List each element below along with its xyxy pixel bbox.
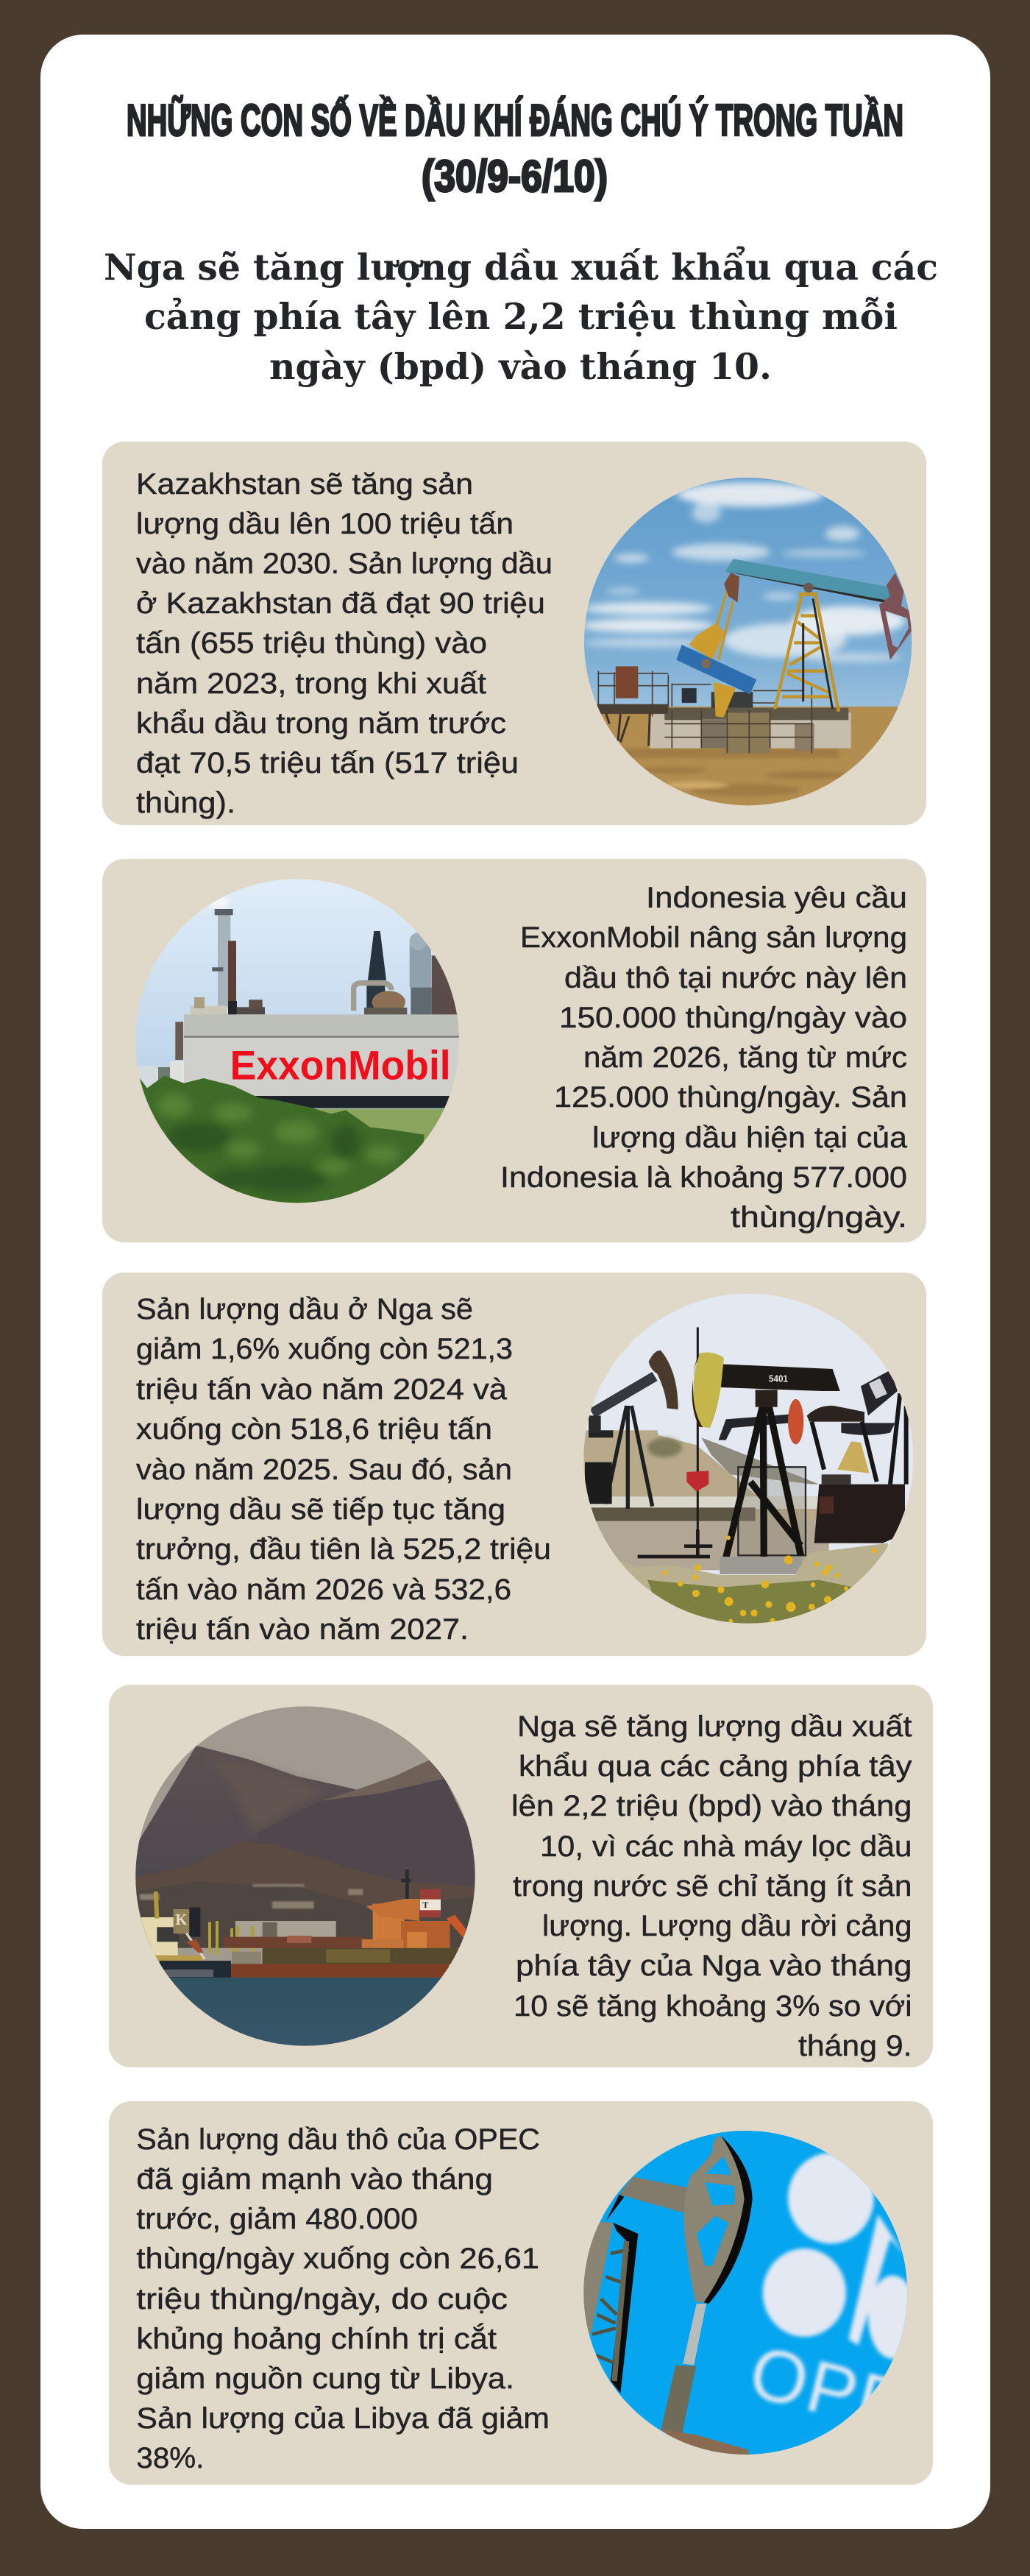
subtitle: ngày (bpd) vào tháng 10. [269,345,772,388]
text: Nga sản lượng: lượng dầu sẽ tiếp tục tăng [136,1493,505,1526]
photo: tanker in port with mountains: K [175,1912,187,1928]
text: OPEC: đã giảm mạnh vào tháng [136,2163,493,2195]
panel: Indonesia [102,859,926,1242]
text: Nga sản lượng: triệu tấn vào năm 2024 và [136,1373,507,1406]
text: Indonesia [500,882,907,1234]
text: Nga sản lượng: triệu tấn vào năm 2027. [136,1613,469,1646]
text: Kazakhstan: thùng). [136,787,235,819]
subtitle: cảng phía tây lên 2,2 triệu thùng mỗi [144,295,898,338]
text: Kazakhstan: khẩu dầu trong năm trước [136,707,506,740]
photo: pumpjack with OPEC logo: OPEC [742,2330,970,2462]
text: Kazakhstan: Kazakhstan sẽ tăng sản [136,468,473,500]
photo: tanker in port with mountains [135,1706,475,2046]
photo: ExxonMobil refinery tank: ExxonMobil [230,1042,451,1089]
photo: pumpjack on steppe [584,478,912,805]
text: Indonesia: Indonesia là khoảng 577.000 [500,1161,907,1194]
text: Indonesia: năm 2026, tăng từ mức [583,1041,907,1074]
text: Nga xuất khẩu: 10 sẽ tăng khoảng 3% so với [514,1990,912,2023]
text: Nga sản lượng [136,1293,551,1646]
subtitle: Nga sẽ tăng lượng dầu xuất khẩu qua các [104,246,938,289]
text: Nga sản lượng: giảm 1,6% xuống còn 521,3 [136,1333,513,1365]
photo: black pumpjacks and yellow flowers: 5401 [769,1373,788,1384]
subtitle [104,246,938,388]
text: Nga xuất khẩu: lên 2,2 triệu (bpd) vào tháng [511,1790,912,1822]
panel: Nga xuất khẩu [109,1685,933,2067]
text: Nga xuất khẩu: trong nước sẽ chỉ tăng ít sản [513,1870,912,1903]
text: Nga xuất khẩu: phía tây của Nga vào tháng [516,1950,912,1982]
text: Indonesia: thùng/ngày. [731,1201,907,1234]
text: Nga xuất khẩu: lượng. Lượng dầu rời cảng [542,1910,912,1942]
text: OPEC: 38%. [136,2442,204,2474]
text: Kazakhstan: tấn (655 triệu thùng) vào [136,627,487,659]
text: Nga xuất khẩu: Nga sẽ tăng lượng dầu xuất [517,1710,912,1743]
text: Kazakhstan [136,468,553,819]
title: (30/9-6/10) [422,152,608,201]
text: OPEC: thùng/ngày xuống còn 26,61 [136,2243,539,2275]
text: Kazakhstan: năm 2023, trong khi xuất [136,668,486,700]
photo: ExxonMobil refinery tank [135,879,459,1203]
text: Nga sản lượng: trưởng, đầu tiên là 525,2 triệu [136,1533,551,1565]
text: OPEC: Sản lượng dầu thô của OPEC [136,2123,540,2156]
text: OPEC [136,2123,550,2474]
text: OPEC: khủng hoảng chính trị cắt [136,2323,497,2355]
photo: tanker in port with mountains: T [422,1900,428,1910]
text: Indonesia: Indonesia yêu cầu [646,882,907,914]
text: OPEC: triệu thùng/ngày, do cuộc [136,2283,508,2315]
panel: Kazakhstan [102,442,926,825]
text: OPEC: trước, giảm 480.000 [136,2203,418,2235]
text: Kazakhstan: ở Kazakhstan đã đạt 90 triệu [136,587,545,620]
text: Nga xuất khẩu [511,1710,912,2062]
text: OPEC: Sản lượng của Libya đã giảm [136,2402,550,2435]
panel: OPEC [109,2101,970,2485]
title [127,96,903,201]
photo: pumpjack with OPEC logo [583,2131,908,2455]
text: Kazakhstan: đạt 70,5 triệu tấn (517 triệu [136,747,519,779]
text: Kazakhstan: vào năm 2030. Sản lượng dầu [136,548,553,580]
text: Nga sản lượng: Sản lượng dầu ở Nga sẽ [136,1293,473,1326]
text: Kazakhstan: lượng dầu lên 100 triệu tấn [136,508,514,540]
text: Nga xuất khẩu: khẩu qua các cảng phía tây [519,1750,912,1783]
photo: black pumpjacks and yellow flowers [574,1288,920,1634]
text: Indonesia: lượng dầu hiện tại của [592,1122,907,1154]
text: Indonesia: ExxonMobil nâng sản lượng [520,921,907,954]
text: Indonesia: 150.000 thùng/ngày vào [559,1002,907,1034]
text: Indonesia: dầu thô tại nước này lên [564,962,907,994]
text: Nga sản lượng: vào năm 2025. Sau đó, sản [136,1454,512,1486]
text: OPEC: giảm nguồn cung từ Libya. [136,2363,514,2395]
text: Nga xuất khẩu: tháng 9. [798,2030,912,2062]
panel: Nga sản lượng [102,1273,926,1656]
text: Nga xuất khẩu: 10, vì các nhà máy lọc dầu [540,1830,912,1863]
text: Nga sản lượng: tấn vào năm 2026 và 532,6 [136,1574,511,1606]
text: Nga sản lượng: xuống còn 518,6 triệu tấn [136,1413,492,1446]
text: Indonesia: 125.000 thùng/ngày. Sản [554,1081,907,1114]
